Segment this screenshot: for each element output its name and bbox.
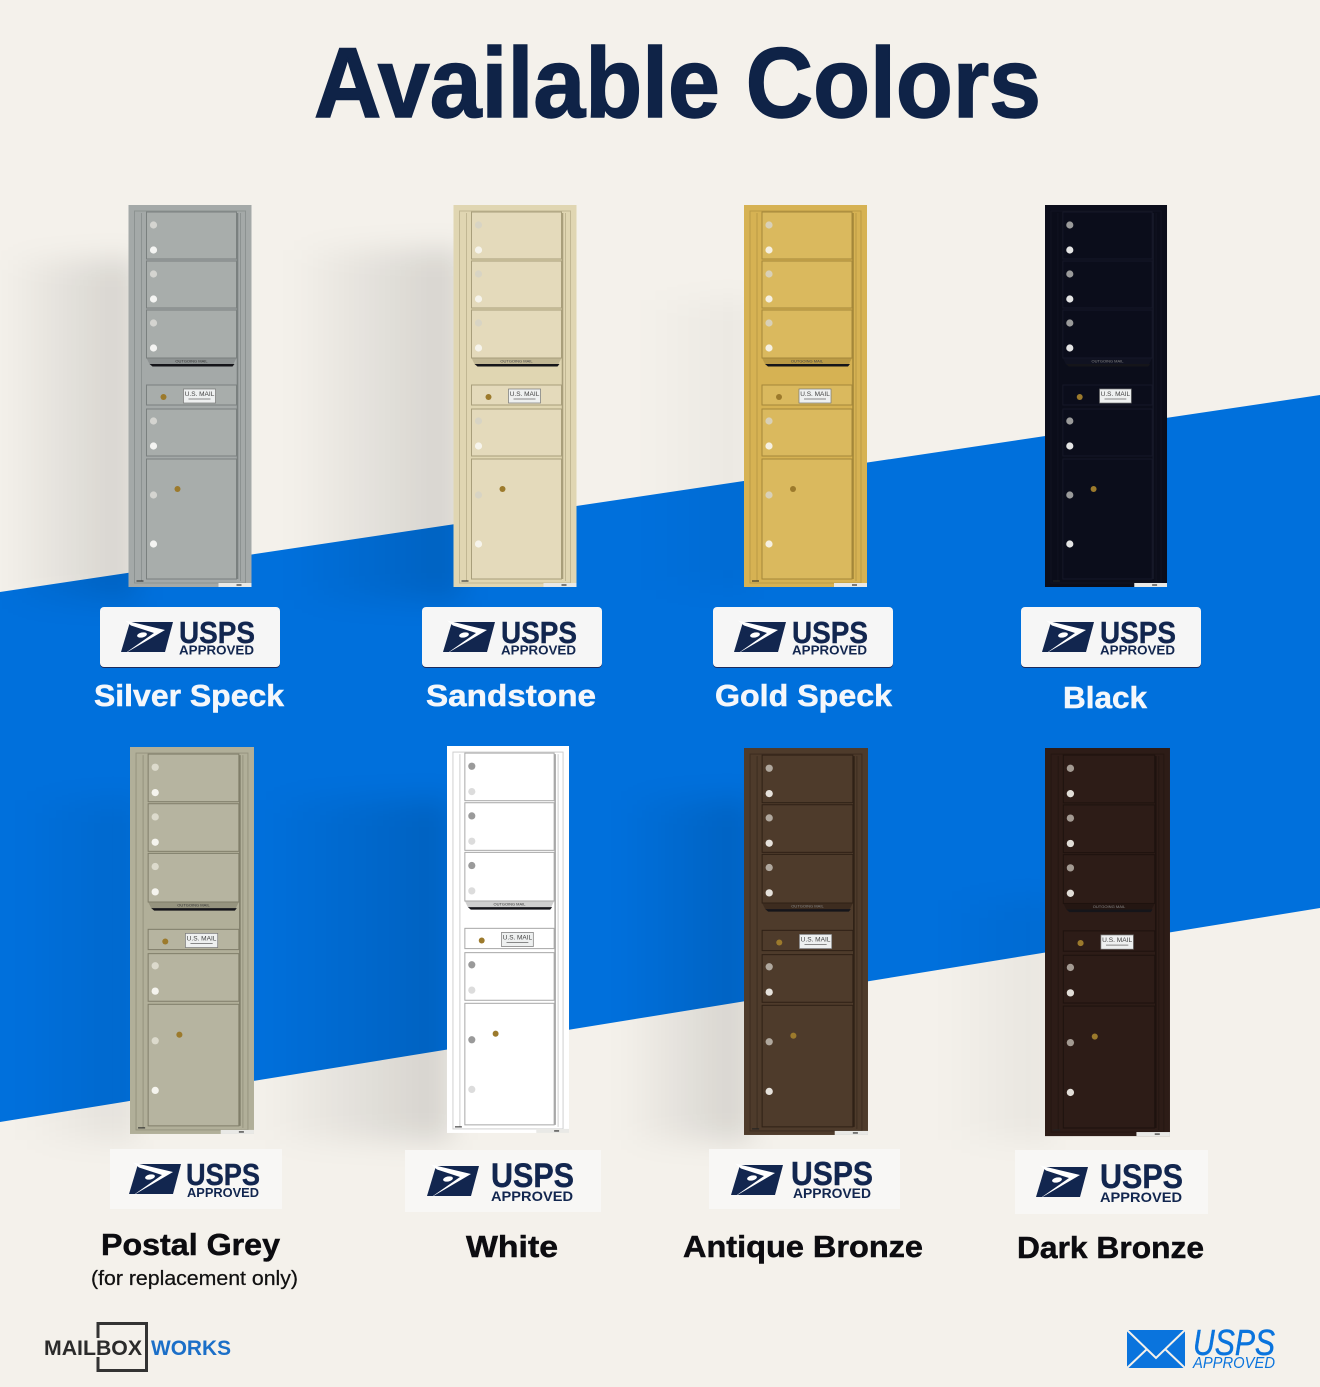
badge: black: USPS — [1100, 615, 1176, 650]
label: white: White — [466, 1229, 558, 1264]
badge: antique bronze: USPS — [791, 1155, 873, 1192]
logo: mailbox works: MAILBOX — [44, 1337, 142, 1360]
label: silver speck: Silver Speck — [94, 678, 285, 713]
label: sandstone: Sandstone — [426, 678, 596, 713]
badge: silver speck: USPS — [179, 615, 255, 650]
badge: dark bronze: USPS — [1100, 1158, 1183, 1196]
label: gold speck: Gold Speck — [715, 678, 893, 713]
badge: white: APPROVED — [491, 1188, 573, 1204]
badge: dark bronze: APPROVED — [1100, 1189, 1182, 1205]
badge: sandstone: USPS — [501, 615, 577, 650]
badge: white — [405, 1150, 601, 1212]
label: black: Black — [1063, 680, 1148, 715]
logo: usps approved: APPROVED — [1192, 1355, 1275, 1372]
badge: antique bronze: APPROVED — [793, 1186, 871, 1201]
badge: dark bronze — [1015, 1150, 1208, 1214]
badge: gold speck: APPROVED — [792, 644, 867, 658]
label: postal grey: Postal Grey — [101, 1227, 281, 1262]
mailbox: antique bronze — [744, 748, 868, 1135]
badge: gold speck: USPS — [792, 615, 868, 650]
note: for replacement only: (for replacement only) — [91, 1268, 298, 1290]
mailbox: gold speck — [744, 205, 867, 587]
logo: mailbox works: WORKS — [151, 1337, 231, 1360]
badge: sandstone: APPROVED — [501, 644, 576, 658]
badge: postal grey: APPROVED — [187, 1186, 259, 1200]
logo: mailbox works — [44, 1324, 231, 1370]
badge: sandstone — [422, 607, 602, 668]
mailbox shadows — [0, 250, 1050, 1140]
mailbox: white — [447, 746, 569, 1133]
mailbox: black — [1045, 205, 1167, 587]
badge: postal grey: USPS — [186, 1157, 260, 1192]
mailbox: sandstone — [454, 205, 576, 587]
badge: gold speck — [713, 607, 893, 668]
badge: silver speck — [100, 607, 280, 668]
mailbox: dark bronze — [1045, 748, 1170, 1136]
mailbox: postal grey — [130, 747, 254, 1134]
logo: usps approved — [1127, 1322, 1275, 1372]
badge: black — [1021, 607, 1201, 668]
badge: white: USPS — [491, 1157, 574, 1195]
label: dark bronze: Dark Bronze — [1017, 1230, 1204, 1265]
logo: usps approved: USPS — [1193, 1322, 1275, 1363]
badge: silver speck: APPROVED — [179, 644, 254, 658]
badge: postal grey — [110, 1149, 282, 1209]
mailbox: silver speck — [128, 205, 252, 587]
label: antique bronze: Antique Bronze — [683, 1229, 923, 1264]
badge: antique bronze — [709, 1149, 900, 1209]
badge: black: APPROVED — [1100, 644, 1175, 658]
title: Available Colors — [314, 27, 1041, 138]
